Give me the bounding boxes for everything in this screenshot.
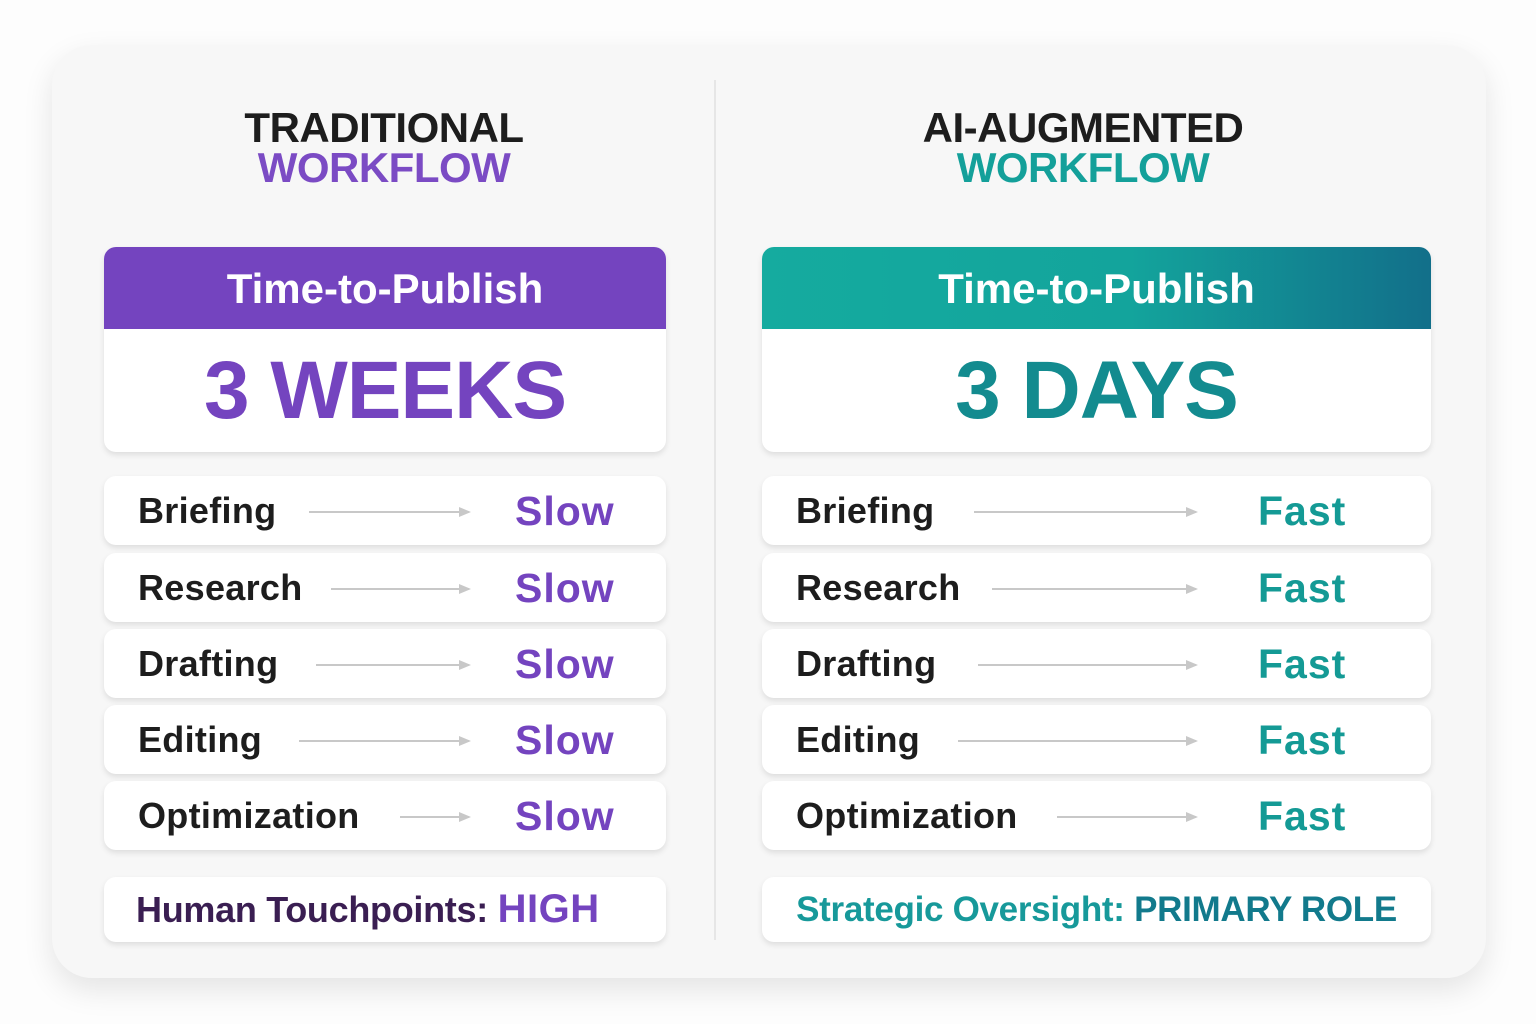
- row briefing: Slow: [515, 488, 615, 534]
- row drafting: [762, 629, 1431, 698]
- row editing: [104, 705, 666, 774]
- list: ai steps: [761, 487, 1432, 854]
- row drafting: Drafting: [796, 642, 936, 684]
- title: traditional: TRADITIONAL: [244, 104, 524, 151]
- big number: 3 WEEKS: [204, 345, 566, 436]
- row briefing: Briefing: [796, 490, 934, 530]
- row research: Research: [796, 566, 961, 608]
- row briefing: Fast: [1258, 488, 1346, 534]
- row optimization: Optimization: [138, 794, 360, 836]
- list: traditional steps: [103, 487, 667, 854]
- header band: Time-to-Publish: [938, 265, 1255, 312]
- panel: traditional time-to-publish: [104, 247, 666, 452]
- header band: [104, 247, 666, 329]
- row research: Fast: [1258, 565, 1346, 611]
- title: ai-augmented: AI-AUGMENTED: [923, 104, 1243, 151]
- callout: human touchpoints: [104, 877, 666, 942]
- row drafting: Slow: [515, 641, 615, 687]
- row drafting: Drafting: [138, 642, 278, 684]
- callout: human touchpoints: Human Touchpoints:: [136, 888, 488, 930]
- callout: strategic oversight: [762, 877, 1431, 942]
- row briefing: [104, 476, 666, 545]
- callout: human touchpoints: HIGH: [498, 887, 600, 931]
- row briefing: [762, 476, 1431, 545]
- header band: [762, 247, 1431, 329]
- row editing: Fast: [1258, 717, 1346, 763]
- row research: [104, 553, 666, 622]
- row research: [762, 553, 1431, 622]
- callout: strategic oversight: PRIMARY ROLE: [1134, 890, 1397, 928]
- callout: strategic oversight: Strategic Oversight:: [796, 890, 1125, 928]
- row research: Research: [138, 566, 303, 608]
- row optimization: Slow: [515, 793, 615, 839]
- row editing: Editing: [796, 718, 920, 760]
- row research: Slow: [515, 565, 615, 611]
- row briefing: Briefing: [138, 490, 276, 530]
- row optimization: Fast: [1258, 793, 1346, 839]
- row editing: Editing: [138, 718, 262, 760]
- title: traditional: WORKFLOW: [258, 144, 510, 191]
- row optimization: [762, 781, 1431, 850]
- title: ai-augmented: [923, 104, 1243, 191]
- title: ai-augmented: WORKFLOW: [957, 144, 1209, 191]
- row editing: [762, 705, 1431, 774]
- row optimization: Optimization: [796, 794, 1018, 836]
- row editing: Slow: [515, 717, 615, 763]
- panel: ai time-to-publish: [762, 247, 1431, 452]
- row drafting: Fast: [1258, 641, 1346, 687]
- title: traditional: [244, 104, 524, 191]
- row drafting: [104, 629, 666, 698]
- row optimization: [104, 781, 666, 850]
- header band: Time-to-Publish: [227, 265, 543, 312]
- big number: 3 DAYS: [955, 345, 1238, 436]
